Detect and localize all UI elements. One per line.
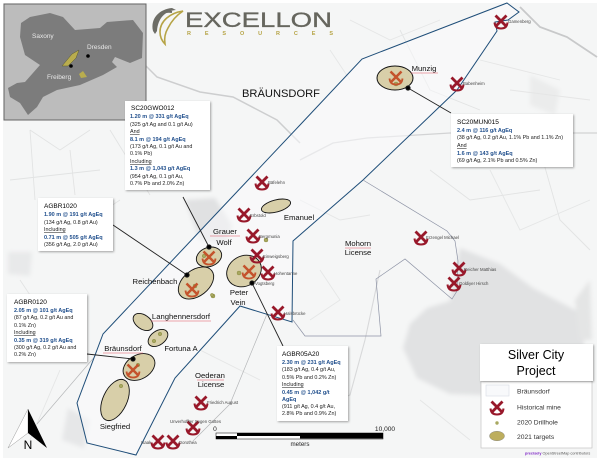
callout: AGBR0120: 0.2% Zn) xyxy=(14,352,36,358)
north arrow xyxy=(8,409,47,452)
legend: 2020 Drillhole: 2020 Drillhole xyxy=(517,420,558,426)
mine: Gamenberg: Gamenberg xyxy=(508,19,531,24)
mine: Gottlehn: Bäfelehn xyxy=(268,180,286,185)
map labels: Siegfried xyxy=(100,422,130,431)
mine: Munzig xyxy=(390,72,402,84)
heading: Bräunsdorf: BRÄUNSDORF xyxy=(242,88,320,100)
legend: Bräunsdorf: Bräunsdorf xyxy=(517,388,550,396)
scale bar: 10,000 xyxy=(375,426,395,433)
callout: AGBR0120 xyxy=(7,294,87,362)
map labels: Vein xyxy=(231,298,245,307)
map labels: Fortuna A xyxy=(164,344,199,353)
callout: SC20GWO012: 1.3 m @ 1,043 g/t AgEq xyxy=(130,166,190,172)
callout: SC20GWO012: Including xyxy=(130,159,152,165)
callout: SC20MUN015: 2.4 m @ 116 g/t AgEq xyxy=(457,128,512,134)
legend title: Project xyxy=(517,364,556,378)
callout: SC20GWO012: (954 g/t Ag, 0.1 g/t Au, xyxy=(130,174,184,180)
target: Fortuna A xyxy=(145,326,171,350)
mine: Bergmunia: Bergmunia xyxy=(259,234,280,239)
legend: Historical mine: Historical mine xyxy=(517,404,561,412)
callout: AGBR05A20 xyxy=(277,346,348,421)
mine: Erzengel Michael xyxy=(414,232,459,244)
leader lines xyxy=(87,86,451,361)
map labels: License xyxy=(345,248,371,257)
map labels: Grauer xyxy=(213,227,237,236)
legend title xyxy=(480,344,593,381)
mine: Erbstolln: Erbstold xyxy=(250,213,266,218)
map labels: Reichenbach xyxy=(133,277,177,286)
callout: AGBR0120: 0.1% Zn) xyxy=(14,323,36,329)
mine: Zweigsberg xyxy=(250,250,289,262)
map labels: Emanuel xyxy=(284,213,314,222)
callout: SC20MUN015 xyxy=(451,114,573,167)
map labels: Wolf xyxy=(216,238,232,247)
mine: Reicher Matthias xyxy=(452,262,496,276)
Oederan license outline xyxy=(37,314,267,441)
callout: AGBR0120: (300 g/t Ag, 0.2 g/t Au and xyxy=(14,345,76,351)
credit: precisely: precisely OpenStreetMap contributors xyxy=(525,452,590,456)
mine: Zweigsberg: Einweigsberg xyxy=(263,254,289,259)
legend: 2021 targets: 2021 targets xyxy=(517,434,555,441)
callout: AGBR05A20: AgEq xyxy=(282,397,296,403)
callout: SC20GWO012: 0.7% Pb and 2.0% Zn) xyxy=(130,181,184,187)
callout: SC20GWO012: SC20GWO012 xyxy=(131,105,175,112)
target: Siegfried xyxy=(95,375,135,425)
callout: SC20MUN015: (69 g/t Ag, 2.1% Pb and 0.5% Zn) xyxy=(457,158,538,164)
map labels xyxy=(100,64,438,431)
mine: Babenheim: Babenheim xyxy=(463,81,485,86)
map labels: Langhennersdorf xyxy=(152,312,211,321)
mine: Babenheim xyxy=(450,78,485,90)
map labels: Bräunsdorf xyxy=(104,344,143,353)
mine: Friedrich August xyxy=(194,396,239,410)
mine: Wolf xyxy=(202,252,216,264)
inset map: Saxony: Dresden xyxy=(87,44,112,51)
text: Vogtsberg: Vogtsberg xyxy=(255,281,275,286)
mine: Reichenbach xyxy=(186,284,198,296)
callout: AGBR1020: Including xyxy=(44,227,66,233)
inset map: Saxony xyxy=(4,4,146,120)
logo: Excellon Resources xyxy=(152,8,333,44)
callout: AGBR0120: AGBR0120 xyxy=(14,299,47,306)
inset map: Saxony: Freiberg xyxy=(47,74,72,81)
mine: Dorothea: Dorothea xyxy=(179,440,197,445)
mine: Friedrich August: Friedrich August xyxy=(207,400,239,405)
logo: Excellon Resources: RESOURCES xyxy=(187,31,333,37)
callout: AGBR05A20: 2.30 m @ 231 g/t AgEq xyxy=(282,360,341,366)
mine: Halsbrücke: Halsbrücke xyxy=(284,311,306,316)
callout: SC20GWO012: (325 g/t Ag and 0.1 g/t Au) xyxy=(130,122,193,128)
callout: SC20GWO012: 0.1% Pb) xyxy=(130,151,152,157)
callout: SC20GWO012: And xyxy=(130,129,140,135)
target: Langhennersdorf xyxy=(130,310,156,334)
mine: Unverhoffter Segen Gottes xyxy=(170,419,221,434)
2020 drillholes xyxy=(119,82,398,388)
mine: Hohentanne: Hohentanne xyxy=(274,271,298,276)
mine: Reicher Matthias: Reicher Matthias xyxy=(464,267,496,272)
callout: SC20MUN015: 1.6 m @ 143 g/t AgEq xyxy=(457,151,513,157)
mine: Bräunsdorf xyxy=(126,364,140,378)
legend xyxy=(480,344,593,448)
Bräunsdorf license polygon xyxy=(77,3,519,455)
callout: SC20MUN015: And xyxy=(457,143,467,149)
mine: Goldner Hirsch: Goldiyer Hirsch xyxy=(459,281,489,286)
mine: Bergmunia xyxy=(246,230,280,242)
mine: Halsbrücke xyxy=(272,306,306,320)
callout: AGBR05A20: AGBR05A20 xyxy=(282,351,320,358)
mine: Erbstolln xyxy=(238,208,266,222)
mine: Peter Vein xyxy=(242,266,256,278)
callout: AGBR0120: 2.05 m @ 101 g/t AgEq xyxy=(14,308,73,314)
callout: AGBR05A20: (911 g/t Ag, 0.4 g/t Au, xyxy=(282,404,335,410)
mine: Erzengel Michael: Erzengel Michael xyxy=(426,235,459,240)
callout: AGBR1020 xyxy=(38,198,113,251)
map labels: License xyxy=(198,380,224,389)
north arrow: N xyxy=(24,438,32,452)
callout: AGBR05A20: Including xyxy=(282,382,304,388)
target: Reichenbach xyxy=(172,260,220,306)
scale bar: 0 xyxy=(213,426,217,433)
callout: AGBR1020: 1.90 m @ 191 g/t AgEq xyxy=(44,212,103,218)
target: Bräunsdorf xyxy=(118,348,160,386)
mine: Dorothea xyxy=(166,436,197,448)
map labels: Mohorn xyxy=(345,239,371,248)
mine: Goldner Hirsch xyxy=(448,278,489,290)
callout: AGBR1020: (356 g/t Ag, 2.0 g/t Au) xyxy=(44,242,98,248)
scale bar: meters xyxy=(291,441,309,448)
map labels: Peter xyxy=(230,288,249,297)
callout: AGBR05A20: 2.8% Pb and 0.9% Zn) xyxy=(282,411,336,417)
callout: AGBR0120: Including xyxy=(14,330,36,336)
callout: SC20GWO012: 1.20 m @ 331 g/t AgEq xyxy=(130,114,189,120)
callout: SC20GWO012: 8.1 m @ 194 g/t AgEq xyxy=(130,137,186,143)
callout: SC20GWO012: (173 g/t Ag, 0.1 g/t Au and xyxy=(130,144,192,150)
callout: AGBR0120: 0.35 m @ 319 g/t AgEq xyxy=(14,338,73,344)
mine: Isaak: Isaak xyxy=(141,440,152,445)
target: Peter Vein xyxy=(221,249,267,293)
target: Wolf xyxy=(194,244,224,270)
mine: Gamenberg xyxy=(494,16,531,28)
mine: Gottlehn xyxy=(256,176,286,190)
inset map: Saxony: Saxony xyxy=(32,33,54,40)
callout: AGBR05A20: (183 g/t Ag, 0.4 g/t Au, xyxy=(282,367,336,373)
logo: Excellon Resources: EXCELLON xyxy=(185,9,332,32)
callout: SC20MUN015: SC20MUN015 xyxy=(457,119,499,126)
callout: AGBR1020: AGBR1020 xyxy=(44,203,77,210)
mine: Unverhoffter Segen Gottes: Unverhoffter Segen Gottes xyxy=(170,419,221,424)
mine: Isaak xyxy=(141,436,164,448)
callout: SC20GWO012 xyxy=(125,101,210,190)
callout: AGBR1020: 0.71 m @ 505 g/t AgEq xyxy=(44,235,103,241)
callout: SC20MUN015: (38 g/t Ag, 0.2 g/t Au, 1.1% Pb and 1.1% Zn) xyxy=(457,135,563,141)
callout: AGBR1020: (134 g/t Ag, 0.8 g/t Au) xyxy=(44,220,98,226)
target: Munzig xyxy=(377,66,413,90)
Mohorn license outline xyxy=(293,180,458,336)
scale bar xyxy=(213,426,395,448)
mine: Hohentanne xyxy=(262,266,298,280)
map labels: Munzig xyxy=(412,64,436,73)
callout: AGBR05A20: 0.5% Pb and 0.2% Zn) xyxy=(282,375,336,381)
target: Emanuel xyxy=(260,196,292,216)
callout: AGBR0120: (87 g/t Ag, 0.2 g/t Au and xyxy=(14,315,73,321)
map labels: Oederan xyxy=(195,371,225,380)
legend title: Silver City xyxy=(508,348,565,362)
callout: AGBR05A20: 0.45 m @ 1,042 g/t xyxy=(282,390,330,396)
